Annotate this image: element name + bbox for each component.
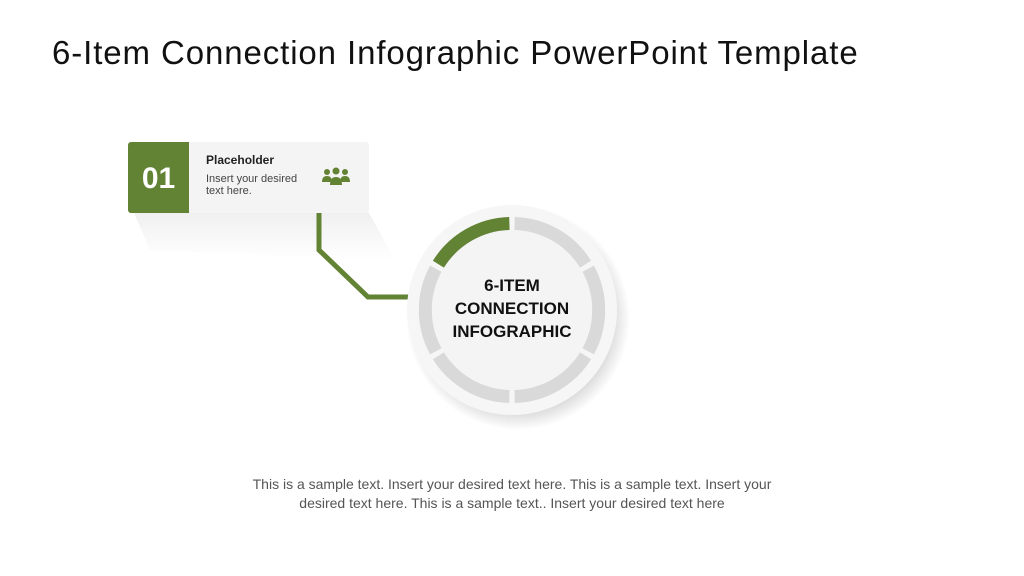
circle shadow xyxy=(406,206,630,430)
card 01 xyxy=(128,142,369,213)
center label xyxy=(452,276,572,341)
number badge xyxy=(128,142,189,213)
card shadow xyxy=(134,213,395,260)
card text: Insert your desired xyxy=(206,173,297,185)
ring segments xyxy=(425,224,599,396)
card text xyxy=(206,173,297,197)
center label: INFOGRAPHIC xyxy=(452,322,572,341)
card heading: Placeholder xyxy=(206,153,274,167)
card text: text here. xyxy=(206,185,252,197)
center label: CONNECTION xyxy=(455,299,569,318)
title: 6-Item Connection Infographic PowerPoint Template xyxy=(52,34,859,71)
icon: people xyxy=(322,168,350,185)
connector line xyxy=(319,213,410,297)
bottom text: This is a sample text. Insert your desired text here. This is a sample text. Insert your desired text here. This is a sample text.. Insert your desired text here xyxy=(253,476,771,511)
circle disc xyxy=(407,205,617,415)
center label: 6-ITEM xyxy=(484,276,540,295)
number badge: 01 xyxy=(142,162,175,195)
